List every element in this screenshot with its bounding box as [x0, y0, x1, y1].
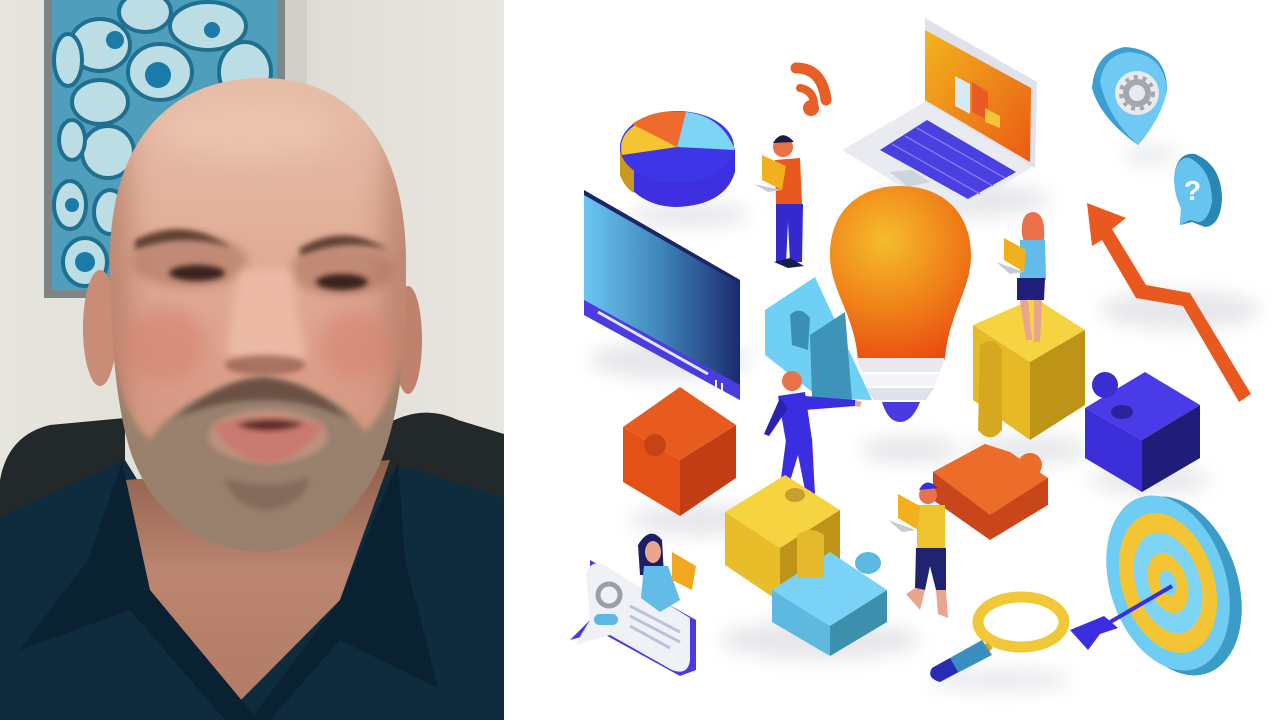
yellow puzzle centre — [725, 475, 840, 602]
ground shadows — [590, 147, 1260, 690]
panel: illustration background — [504, 0, 1280, 720]
wifi icon — [796, 68, 826, 113]
man pointing — [764, 371, 862, 495]
yellow puzzle right — [973, 298, 1085, 440]
dart arrow — [1070, 586, 1172, 650]
wall painting — [44, 0, 285, 298]
light bulb — [830, 186, 971, 422]
magnifying glass — [930, 597, 1064, 682]
laptop chart — [955, 76, 1000, 128]
blue puzzle piece behind bulb — [765, 277, 872, 400]
neck — [125, 460, 390, 706]
question bubble — [1174, 154, 1222, 227]
person with yellow top — [888, 482, 948, 618]
painting shadow — [285, 0, 307, 300]
bald scalp highlight — [175, 110, 324, 154]
office chair — [0, 413, 504, 520]
target and arrow — [1070, 479, 1263, 692]
video screen — [584, 190, 740, 400]
orange puzzle left — [623, 387, 736, 516]
chat panel with settings and seated person — [570, 534, 696, 676]
nose — [225, 268, 306, 375]
head — [110, 78, 406, 552]
map pin — [1092, 47, 1167, 145]
cheek flush — [125, 307, 389, 383]
beard — [112, 355, 404, 560]
laptop — [842, 18, 1037, 217]
lips — [208, 409, 328, 463]
seated person — [638, 534, 696, 612]
eyebrows and eyes — [132, 229, 394, 296]
ears — [83, 270, 422, 394]
question bubble: ? — [1184, 175, 1201, 206]
person with laptop: top — [754, 135, 804, 268]
blue puzzle right — [1085, 372, 1200, 492]
light blue puzzle centre — [772, 530, 887, 656]
shirt — [0, 460, 504, 720]
pie chart — [620, 111, 735, 207]
orange flat puzzle — [933, 444, 1048, 540]
panel: speaker video — [0, 0, 504, 720]
person with long hair on yellow puzzle — [996, 212, 1046, 342]
face shading and details — [110, 110, 406, 552]
rising arrow — [1087, 203, 1251, 402]
shirt collar and placket — [20, 462, 438, 720]
head side shading — [110, 140, 406, 414]
